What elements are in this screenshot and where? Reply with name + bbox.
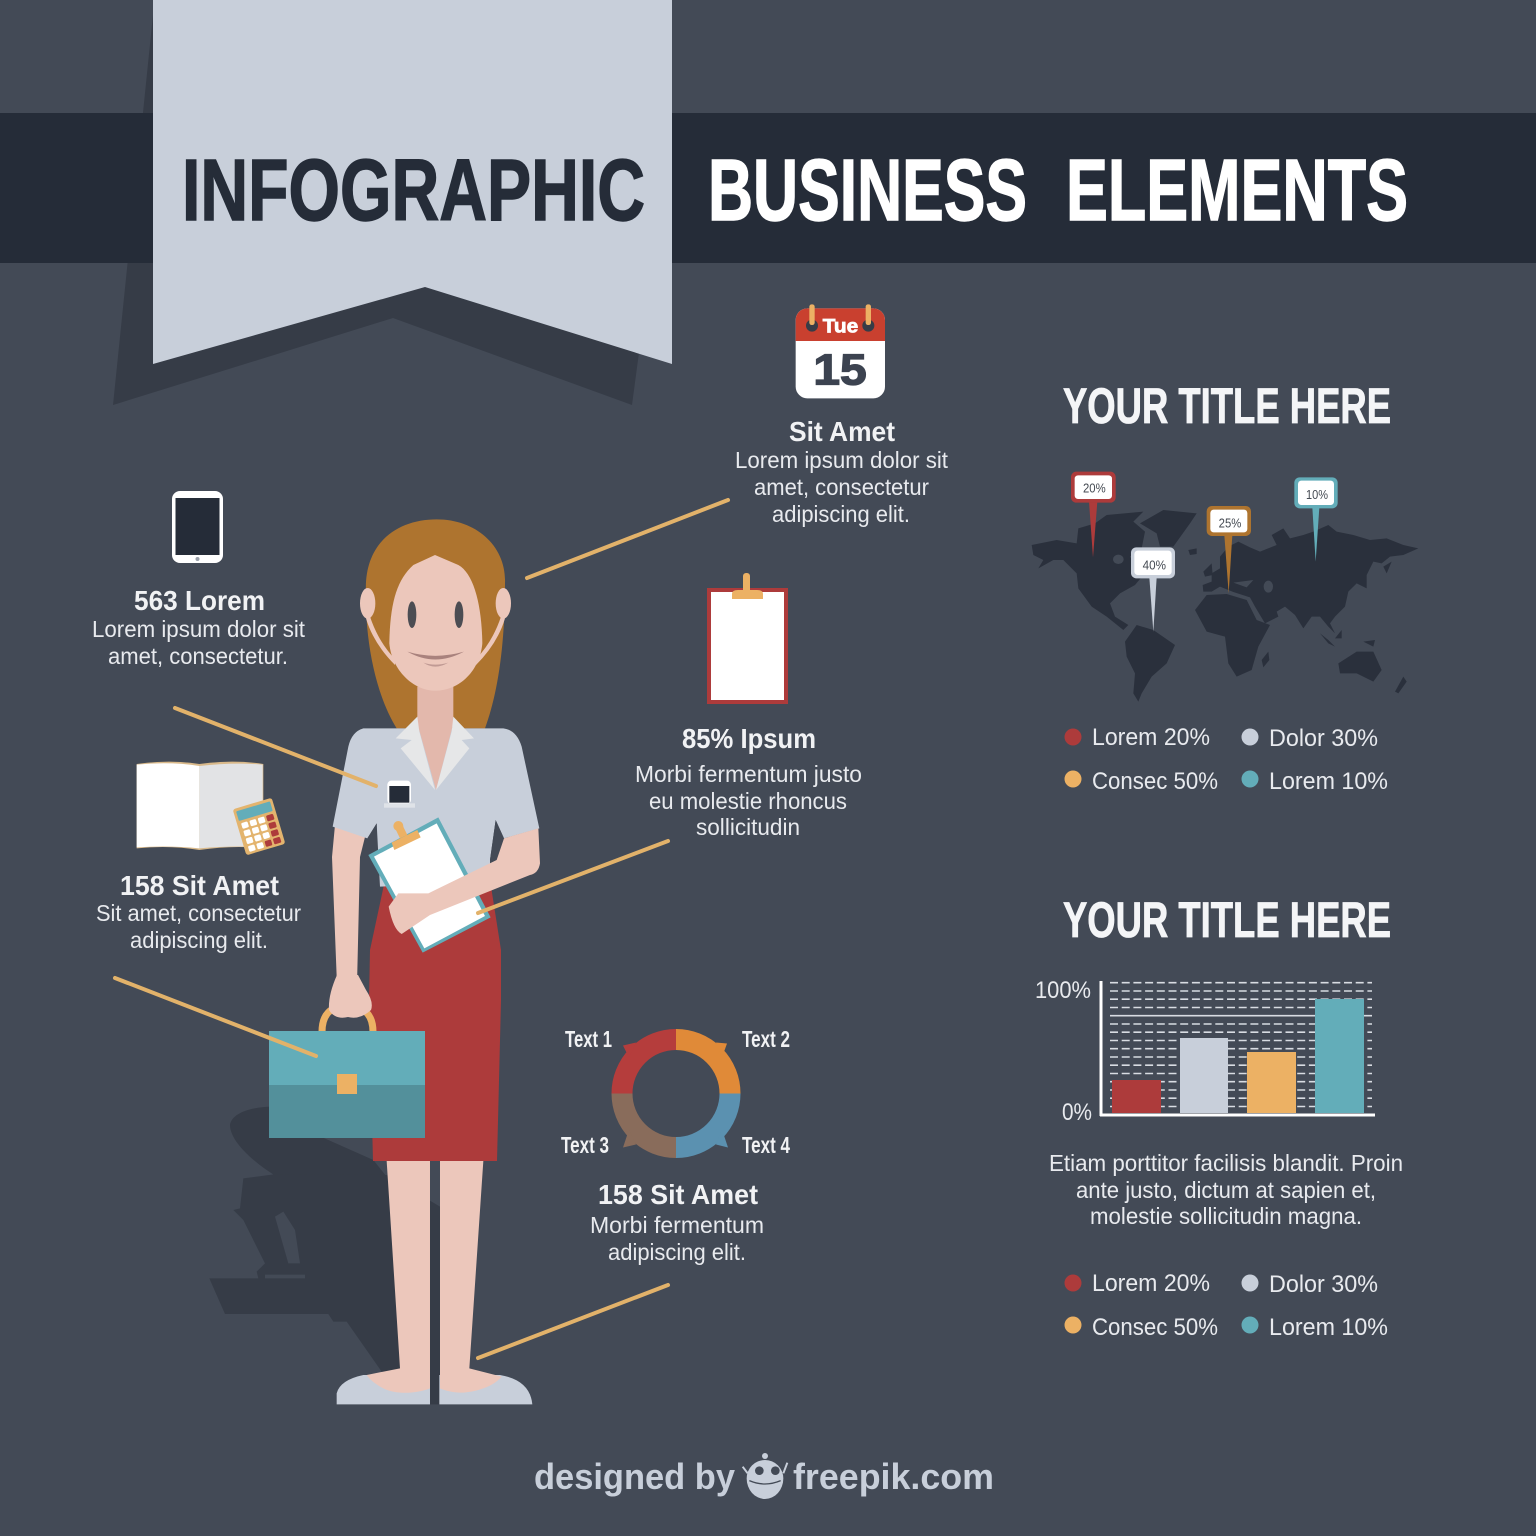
text: 563 Lorem: Lorem ipsum dolor sit	[92, 616, 306, 642]
text: 85% Ipsum: Morbi fermentum justo	[635, 761, 862, 787]
text: 158 Sit Amet: adipiscing elit.	[608, 1239, 746, 1265]
donut labels: Text 4	[742, 1132, 790, 1158]
text: 563 Lorem: amet, consectetur.	[108, 643, 288, 669]
figure: woman with briefcase	[209, 519, 540, 1404]
chart legend: Dolor 30%	[1269, 1271, 1378, 1298]
text: Sit Amet: Lorem ipsum dolor sit	[735, 447, 949, 473]
icon: open book	[137, 762, 263, 850]
blouse	[333, 728, 539, 887]
text: Sit Amet: Sit Amet	[789, 416, 895, 447]
head and neck	[360, 555, 511, 790]
badge phone on chest	[384, 781, 415, 808]
briefcase	[269, 975, 425, 1138]
footer credit: designed by	[534, 1456, 735, 1497]
map legend: Dolor 30%	[1269, 725, 1378, 752]
map legend: Lorem 20%	[1092, 724, 1210, 751]
ribbon	[153, 0, 672, 364]
map pin 10%: 10%	[1306, 488, 1328, 502]
title: INFOGRAPHIC	[182, 142, 645, 239]
donut chart	[622, 1040, 730, 1148]
donut labels: Text 3	[561, 1132, 609, 1158]
footer credit	[534, 1453, 994, 1499]
chart description: ante justo, dictum at sapien et,	[1076, 1177, 1376, 1203]
map pin 20%	[1071, 472, 1116, 557]
donut labels	[561, 1026, 790, 1158]
world map	[1032, 510, 1418, 702]
map pin 25%	[1207, 506, 1251, 593]
block: donut	[561, 1026, 790, 1265]
map legend: Lorem 10%	[1269, 768, 1388, 795]
chart legend	[1064, 1270, 1388, 1341]
text: Sit Amet: amet, consectetur	[754, 474, 929, 500]
chart description	[1049, 1150, 1403, 1229]
text: 158 Sit Amet	[590, 1179, 764, 1265]
chart legend: Lorem 20%	[1092, 1270, 1210, 1297]
text: 85% Ipsum: eu molestie rhoncus	[649, 788, 847, 814]
text: Sit Amet: adipiscing elit.	[772, 501, 910, 527]
text: 563 Lorem	[92, 585, 306, 669]
title	[182, 142, 1408, 239]
heading: YOUR TITLE HERE	[1063, 892, 1391, 948]
map pin 40%: 40%	[1143, 558, 1166, 572]
pointer lines	[115, 500, 728, 1358]
title: ELEMENTS	[1066, 142, 1408, 239]
icon: smartphone	[172, 491, 223, 563]
panel: bar chart	[1035, 892, 1403, 1341]
hair	[366, 519, 505, 728]
title: BUSINESS	[708, 142, 1027, 239]
bar chart: 100%	[1035, 977, 1091, 1004]
icon: clipboard	[707, 573, 788, 704]
map legend	[1064, 724, 1388, 795]
block: clipboard	[635, 573, 862, 840]
chart legend: Lorem 10%	[1269, 1314, 1388, 1341]
block: phone	[92, 491, 306, 669]
text: 563 Lorem: 563 Lorem	[134, 585, 265, 616]
text: 158 Sit Amet: adipiscing elit.	[130, 927, 268, 953]
text: 85% Ipsum: sollicitudin	[696, 814, 800, 840]
block: book and calculator	[96, 762, 301, 953]
map pin 20%: 20%	[1083, 482, 1106, 496]
text: 158 Sit Amet: 158 Sit Amet	[598, 1179, 758, 1210]
chart description: molestie sollicitudin magna.	[1090, 1203, 1362, 1229]
text: 158 Sit Amet: Morbi fermentum	[590, 1212, 764, 1238]
block: calendar	[735, 304, 949, 527]
map pin 25%: 25%	[1219, 517, 1241, 531]
text: 85% Ipsum	[635, 723, 862, 840]
donut labels: Text 2	[742, 1026, 790, 1052]
chart legend: Consec 50%	[1092, 1314, 1218, 1341]
text: 158 Sit Amet: 158 Sit Amet	[120, 870, 279, 901]
icon: calculator	[233, 798, 285, 855]
map pin 10%	[1294, 477, 1338, 562]
panel: world map	[1032, 378, 1418, 795]
text: 158 Sit Amet: Sit amet, consectetur	[96, 900, 301, 926]
ribbon shadow	[113, 15, 640, 405]
held clipboard and right arm	[368, 817, 540, 953]
footer credit: freepik.com	[793, 1456, 994, 1497]
chart description: Etiam porttitor facilisis blandit. Proin	[1049, 1150, 1403, 1176]
map pin 40%	[1131, 547, 1175, 632]
icon: calendar	[796, 304, 885, 398]
text: 85% Ipsum: 85% Ipsum	[682, 723, 816, 754]
skirt	[369, 880, 501, 1161]
heading: YOUR TITLE HERE	[1063, 378, 1391, 434]
bar chart	[1035, 977, 1375, 1126]
icon: calendar: 15	[813, 346, 867, 394]
icon: calendar: Tue	[823, 316, 859, 337]
text: 158 Sit Amet	[96, 870, 301, 953]
header band	[0, 113, 1536, 263]
bar chart: 0%	[1062, 1099, 1092, 1126]
icon: freepik mascot	[743, 1453, 787, 1499]
text: Sit Amet	[735, 416, 949, 527]
left arm	[332, 825, 368, 985]
map legend: Consec 50%	[1092, 768, 1218, 795]
legs and shoes	[337, 1161, 532, 1404]
figure cast shadow	[209, 1107, 440, 1404]
donut labels: Text 1	[565, 1026, 612, 1052]
